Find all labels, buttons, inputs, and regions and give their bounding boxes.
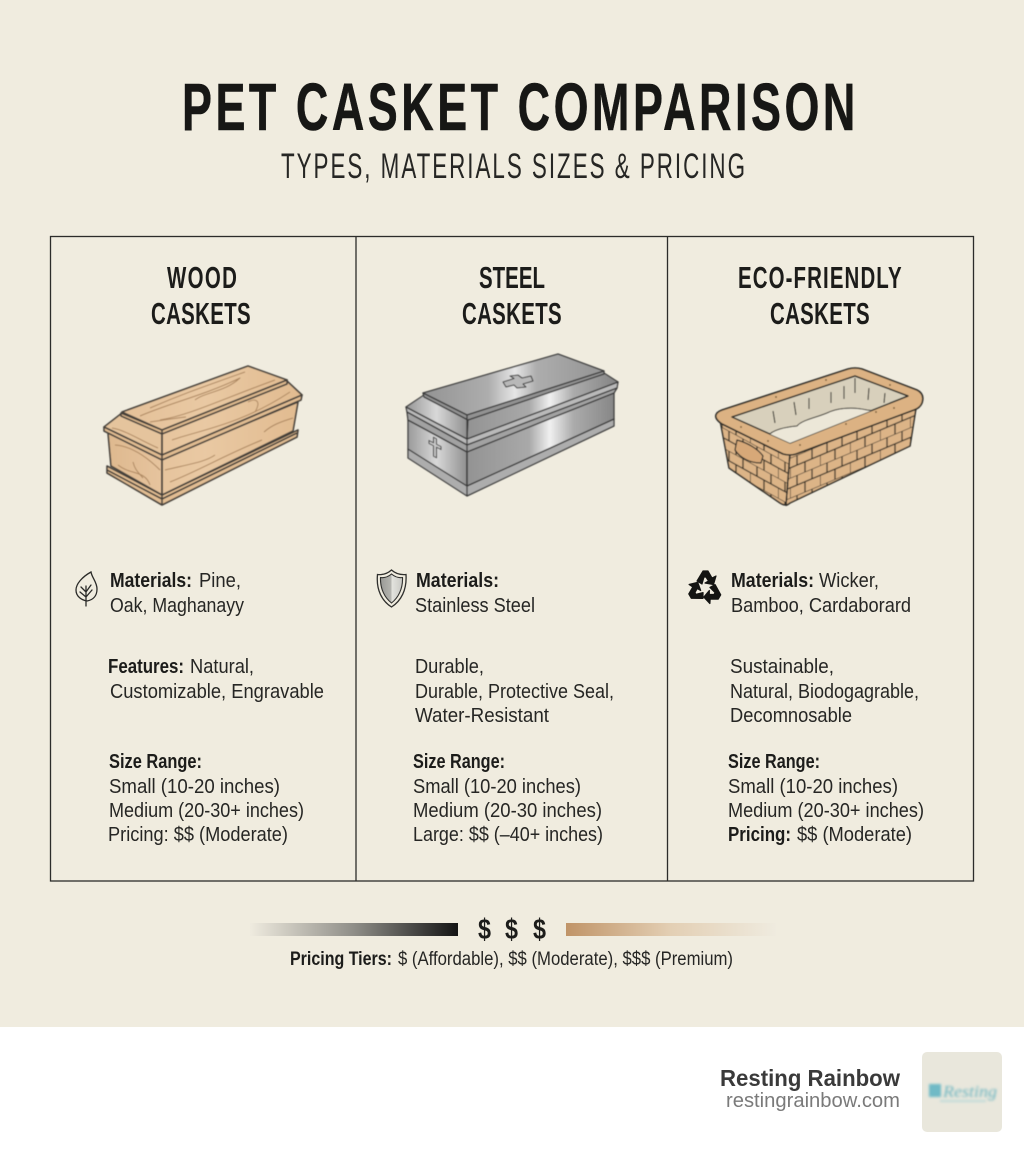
materials row with leaf icon: Oak, Maghanayy: [110, 595, 244, 617]
footer website: restingrainbow.com: [726, 1090, 900, 1112]
size and pricing text: Pricing: $$ (Moderate): [108, 824, 288, 846]
size and pricing text: Medium (20-30+ inches): [109, 800, 304, 822]
pricing tiers text: [290, 949, 733, 970]
heading: eco-friendly caskets: ECO-FRIENDLY: [738, 260, 902, 295]
subtitle: TYPES, MATERIALS SIZES & PRICING: [281, 147, 745, 186]
materials row with leaf icon: Materials:: [110, 570, 192, 592]
features text: Natural, Biodogagrable,: [730, 681, 919, 703]
panel: eco-friendly caskets: [685, 260, 924, 846]
size and pricing text: Medium (20-30+ inches): [728, 800, 924, 822]
features text: Customizable, Engravable: [110, 681, 324, 703]
heading: eco-friendly caskets: CASKETS: [770, 296, 870, 331]
heading: steel caskets: STEEL: [479, 260, 545, 295]
size and pricing text: Pricing:: [728, 824, 791, 846]
size and pricing text: Small (10-20 inches): [728, 776, 898, 798]
comparison table: [50, 236, 974, 881]
illustration: steel casket: [406, 354, 618, 496]
size and pricing text: Large: $$ (–40+ inches): [413, 824, 603, 846]
footer band: [0, 1027, 1024, 1154]
heading: wood caskets: CASKETS: [151, 296, 251, 331]
heading: eco-friendly caskets: [738, 260, 902, 331]
materials row with shield icon: [377, 570, 535, 617]
size and pricing text: Size Range:: [109, 751, 202, 773]
materials row with recycling icon: [685, 570, 911, 617]
features text: Durable,: [415, 656, 484, 678]
materials row with recycling icon: Wicker,: [819, 570, 879, 592]
materials row with leaf icon: Pine,: [199, 570, 241, 592]
icon: leaf: [76, 572, 97, 606]
heading: wood caskets: WOOD: [167, 260, 237, 295]
size and pricing text: Medium (20-30 inches): [413, 800, 602, 822]
pricing tiers legend: [250, 914, 776, 970]
features text: Sustainable,: [730, 656, 834, 678]
gradient bar: tan: [566, 923, 776, 936]
materials row with shield icon: Materials:: [416, 570, 499, 592]
pricing tiers text: Pricing Tiers:: [290, 949, 392, 970]
illustration: wood casket: [104, 366, 302, 505]
logo: Resting: [942, 1082, 997, 1101]
footer brand name: Resting Rainbow: [720, 1065, 900, 1091]
features text: [108, 656, 324, 703]
dollar signs: [478, 914, 546, 946]
dollar signs: $: [533, 914, 546, 946]
features text: Decomnosable: [730, 705, 852, 727]
materials row with recycling icon: Materials:: [731, 570, 814, 592]
size and pricing text: Small (10-20 inches): [109, 776, 280, 798]
features text: [730, 656, 919, 727]
materials row with leaf icon: [76, 570, 244, 617]
heading: wood caskets: [151, 260, 251, 331]
size and pricing text: $$ (Moderate): [797, 824, 912, 846]
size and pricing text: Small (10-20 inches): [413, 776, 581, 798]
features text: Water-Resistant: [415, 705, 549, 727]
size and pricing text: Size Range:: [728, 751, 820, 773]
gradient bar: dark: [250, 923, 458, 936]
size and pricing text: [728, 751, 924, 846]
title: PET CASKET COMPARISON: [182, 70, 855, 145]
dollar signs: $: [505, 914, 518, 946]
features text: [415, 656, 614, 727]
panel: steel caskets: [377, 260, 618, 846]
logo: [922, 1052, 1002, 1132]
illustration: wicker basket: [716, 368, 923, 505]
heading: steel caskets: CASKETS: [462, 296, 562, 331]
size and pricing text: [108, 751, 304, 846]
pricing tiers text: $ (Affordable), $$ (Moderate), $$$ (Premium): [398, 949, 733, 970]
features text: Natural,: [190, 656, 254, 678]
icon: recycling symbol: [685, 571, 724, 606]
heading: steel caskets: [462, 260, 562, 331]
materials row with shield icon: Stainless Steel: [415, 595, 535, 617]
features text: Features:: [108, 656, 184, 678]
features text: Durable, Protective Seal,: [415, 681, 614, 703]
panel: wood caskets: [76, 260, 324, 846]
size and pricing text: Size Range:: [413, 751, 505, 773]
materials row with recycling icon: Bamboo, Cardaborard: [731, 595, 911, 617]
icon: shield: [377, 570, 406, 607]
size and pricing text: [413, 751, 603, 846]
dollar signs: $: [478, 914, 491, 946]
